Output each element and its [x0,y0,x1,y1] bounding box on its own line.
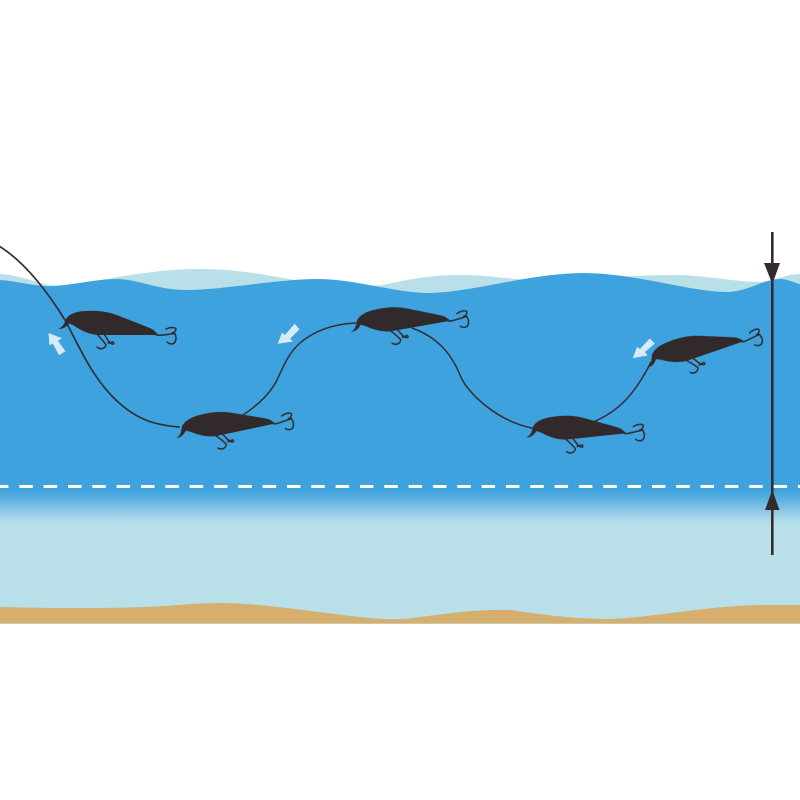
sand bottom [0,603,800,624]
fishing line path [0,246,651,428]
lure 1 [58,311,176,349]
arrow: lure diving 1 [278,324,300,344]
arrow: lure diving 2 [633,338,655,358]
depth range marker [764,232,780,555]
depth limit dashed line [0,485,800,488]
arrow: lure rising [48,333,66,355]
lure 3 [348,294,470,352]
line: third lure to fourth lure [412,328,532,428]
water: fade into lower layer [0,489,800,525]
water: lower light layer [0,524,800,624]
depth marker shaft [771,232,774,555]
lure 4 [524,407,645,457]
depth marker top arrowhead [764,263,780,284]
water: upper blue layer [0,273,800,495]
line: second lure to third lure [243,323,356,415]
lure 2 [172,396,296,458]
depth marker bottom arrowhead [765,490,780,510]
line: fourth lure to fifth lure [593,362,651,422]
line: rod to first lure and down to second lure [0,246,179,427]
lure 5 [641,312,765,387]
back wave [0,269,800,320]
